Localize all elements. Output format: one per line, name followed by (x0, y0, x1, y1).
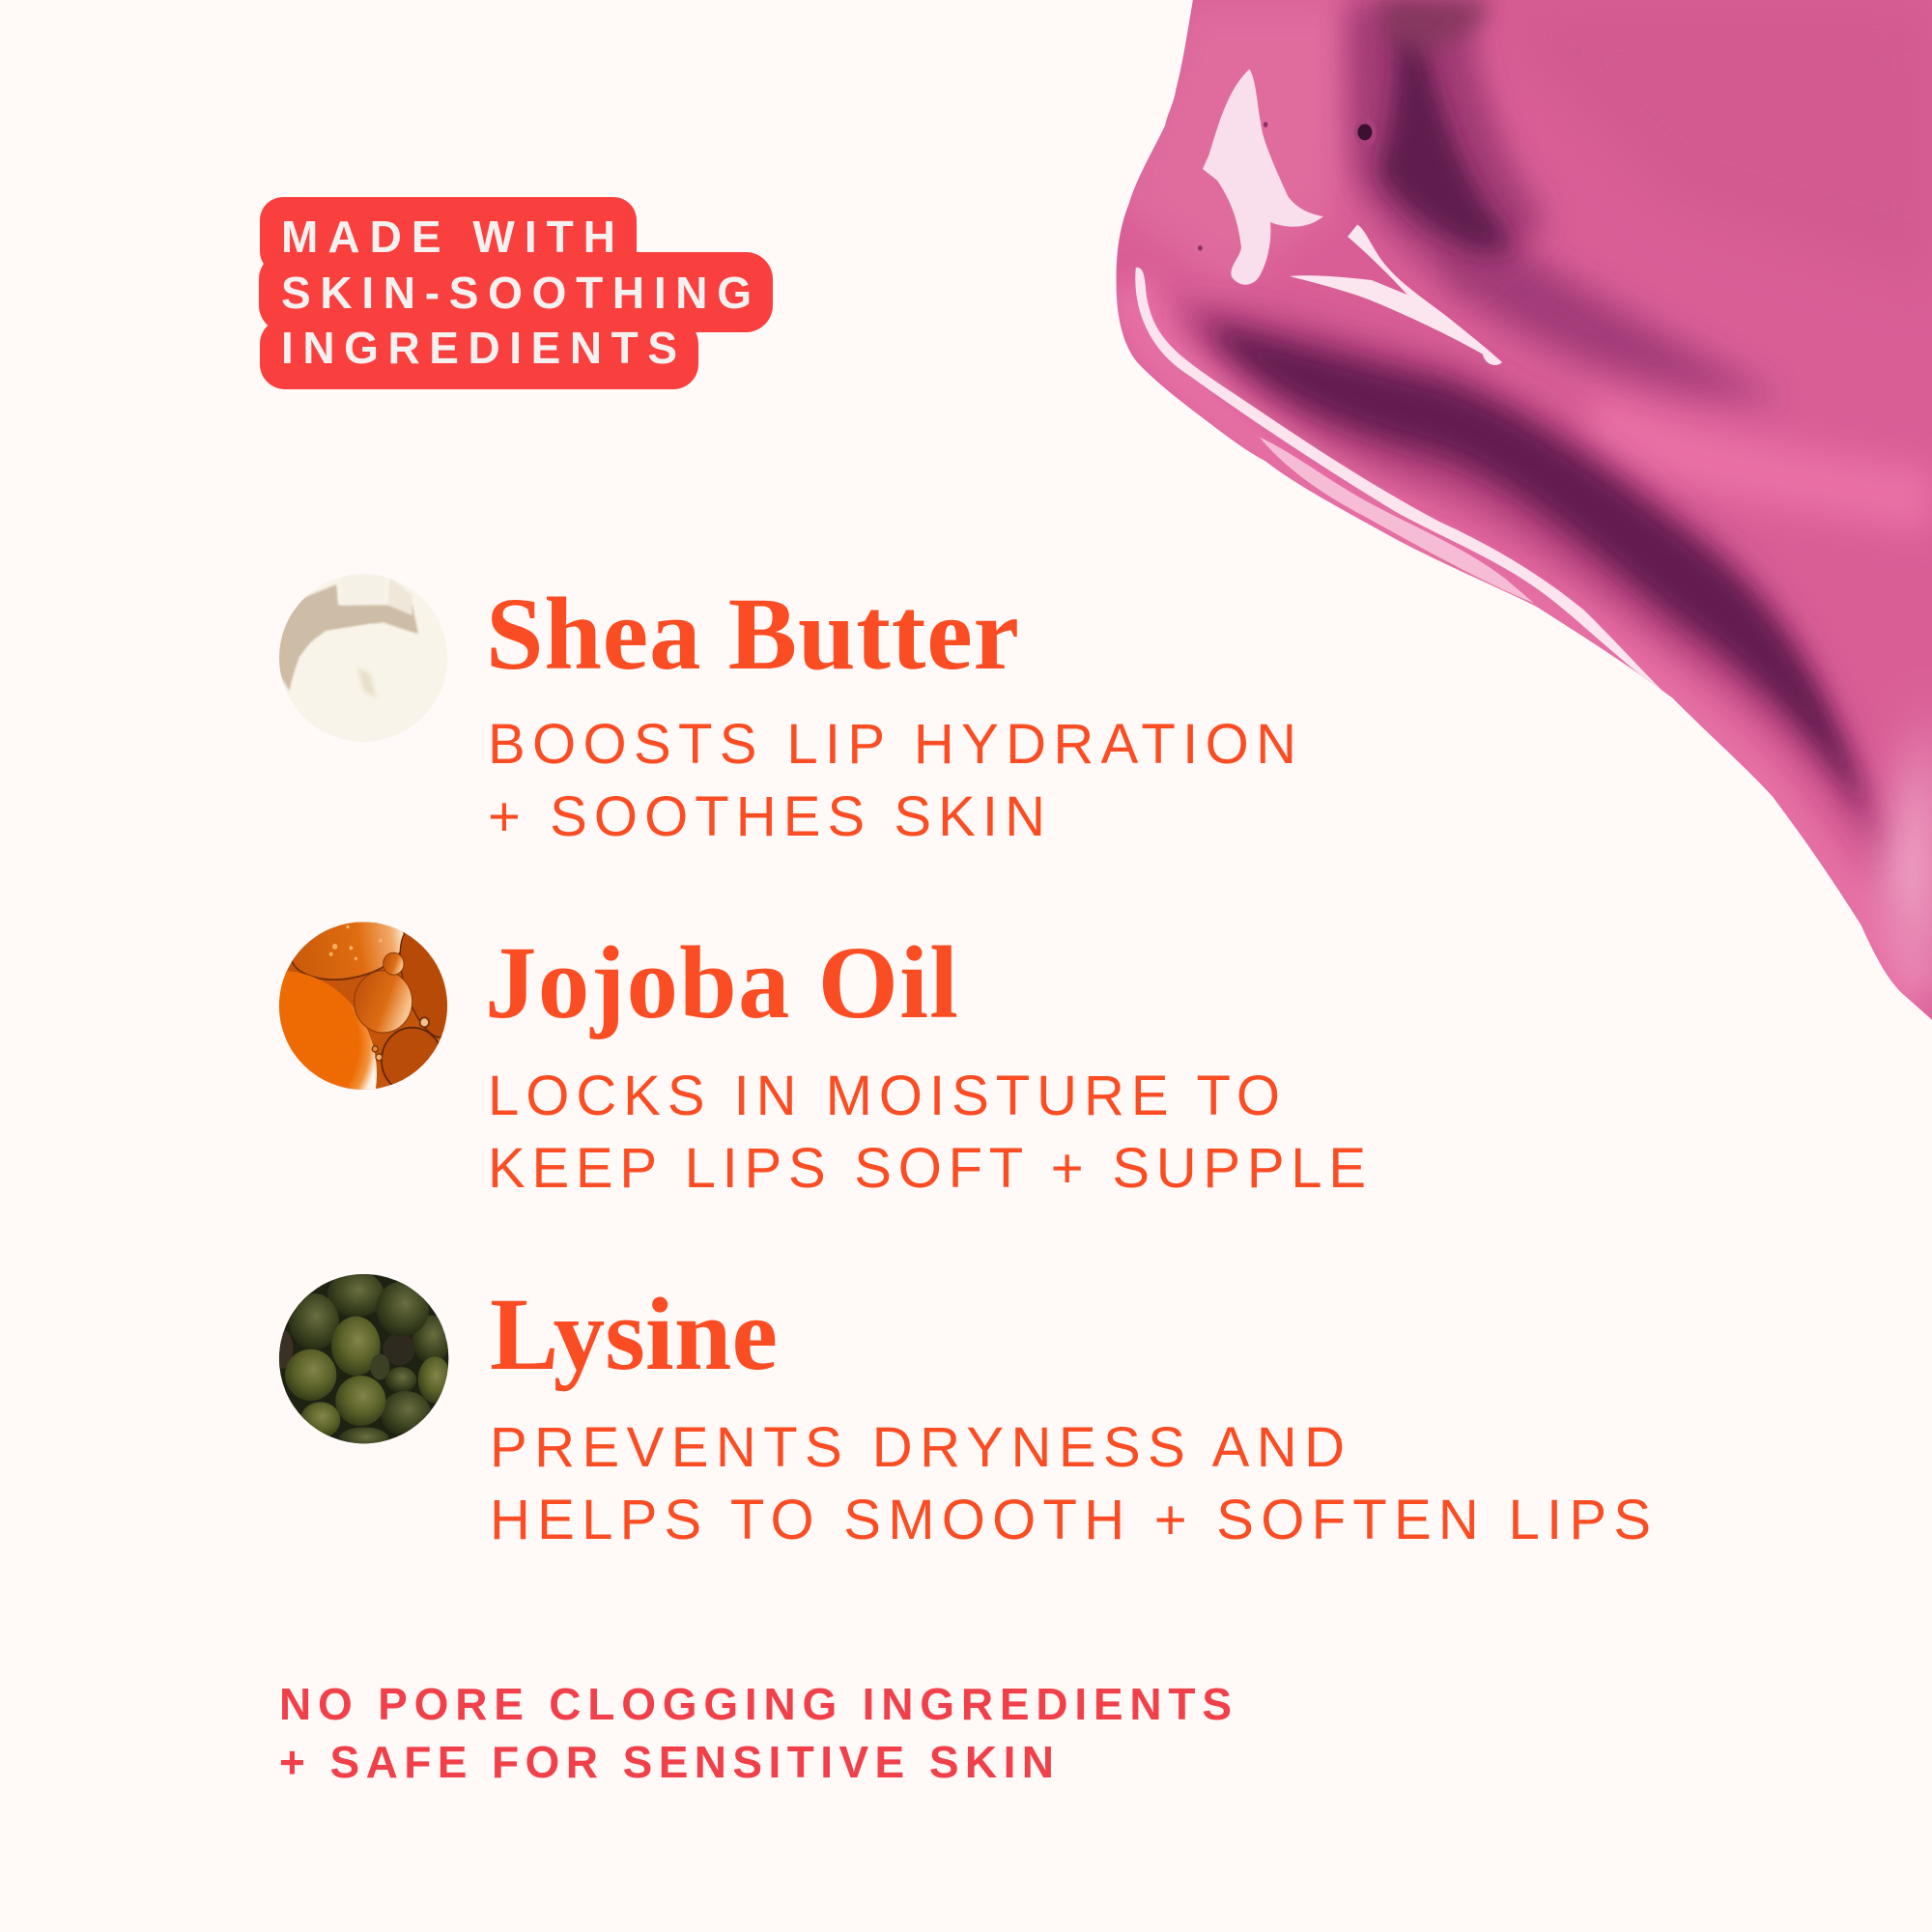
description (488, 713, 1296, 848)
badge: made with skin-soothing ingredients: MADE WITH (281, 212, 615, 262)
description: LOCKS IN MOISTURE TO (488, 1065, 1280, 1127)
description: PREVENTS DRYNESS AND (490, 1416, 1345, 1479)
icon: jojoba oil (278, 922, 447, 1090)
gloss highlights (1203, 70, 1502, 365)
ingredient: lysine (490, 1278, 1651, 1551)
lower highlights (1135, 268, 1664, 693)
soft shadow halo (1446, 242, 1771, 415)
description: KEEP LIPS SOFT + SUPPLE (488, 1137, 1366, 1200)
description: + SOOTHES SKIN (488, 785, 1045, 848)
footer note (279, 1679, 1232, 1787)
footer note: NO PORE CLOGGING INGREDIENTS (279, 1679, 1232, 1729)
footer note: + SAFE FOR SENSITIVE SKIN (279, 1737, 1054, 1787)
badge: made with skin-soothing ingredients: SKIN-SOOTHING (281, 268, 752, 318)
icon: lysine (278, 1274, 448, 1443)
heading: Shea Butter (486, 578, 1019, 692)
badge: made with skin-soothing ingredients (259, 197, 773, 389)
description: HELPS TO SMOOTH + SOFTEN LIPS (490, 1489, 1651, 1551)
icon: shea butter (279, 574, 447, 742)
pores (1354, 121, 1377, 144)
heading: Jojoba Oil (485, 926, 958, 1040)
heading: Lysine (490, 1278, 778, 1392)
ingredient: jojoba oil (485, 926, 1366, 1200)
dark folds (1207, 326, 1866, 813)
badge: made with skin-soothing ingredients: INGREDIENTS (281, 323, 677, 373)
lip gloss swatch image (1117, 0, 1932, 1020)
description (490, 1416, 1651, 1551)
description: BOOSTS LIP HYDRATION (488, 713, 1296, 776)
ingredient: shea butter (486, 578, 1296, 848)
description (488, 1065, 1366, 1200)
